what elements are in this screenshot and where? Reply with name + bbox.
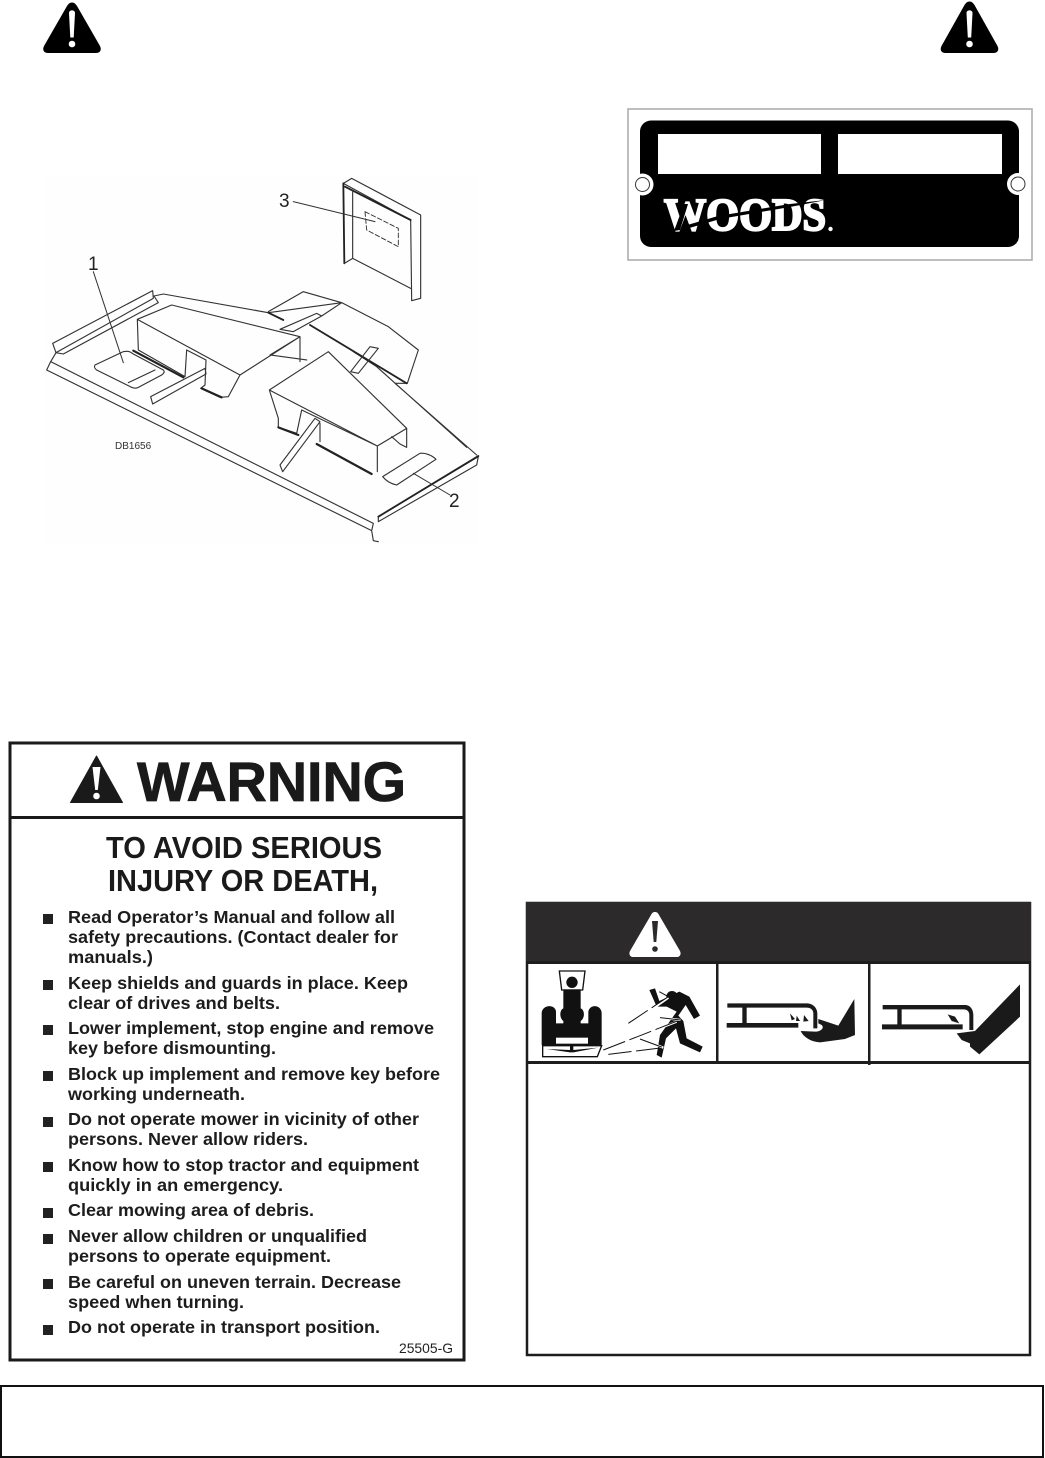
- heading: to avoid serious injury or death: INJURY OR DEATH,: [108, 863, 378, 898]
- safety instruction list: Be careful on uneven terrain. Decrease: [68, 1272, 401, 1292]
- safety instruction list: safety precautions. (Contact dealer for: [68, 927, 398, 947]
- empty notice box at page bottom: [1, 1386, 1043, 1457]
- safety instruction list: Clear mowing area of debris.: [68, 1200, 314, 1220]
- safety instruction list: Read Operator’s Manual and follow all: [68, 907, 395, 927]
- safety instruction list: working underneath.: [67, 1084, 245, 1104]
- diagram: mower deck decal locations: 2: [449, 491, 460, 512]
- left gearbox frame: [137, 305, 307, 397]
- heading: WARNING: WARNING: [137, 750, 406, 813]
- panel: warning decal: [10, 743, 464, 1360]
- diagram: mower deck decal locations: DB1656: [115, 441, 152, 452]
- safety instruction list: Do not operate in transport position.: [68, 1317, 380, 1337]
- safety instruction list: Know how to stop tractor and equipment: [68, 1155, 419, 1175]
- safety instruction list: persons. Never allow riders.: [68, 1129, 308, 1149]
- shield panel: [343, 178, 421, 301]
- heading: to avoid serious injury or death: [106, 830, 382, 898]
- deck outline: [53, 291, 418, 383]
- right gearbox frame: [269, 352, 407, 472]
- pictogram: thrown objects from mower: [542, 971, 703, 1058]
- diagram: mower deck decal locations: [45, 175, 478, 545]
- nameplate: Woods serial tag: [628, 109, 1032, 260]
- safety instruction list: clear of drives and belts.: [68, 993, 280, 1013]
- icon: header alert triangle: [629, 912, 681, 957]
- leader lines: [93, 202, 450, 495]
- safety instruction list: speed when turning.: [68, 1292, 244, 1312]
- safety instruction list: Do not operate mower in vicinity of other: [68, 1109, 419, 1129]
- icon: right safety alert triangle: [941, 2, 998, 53]
- diagram: mower deck decal locations: 1: [88, 254, 99, 275]
- nameplate: Woods serial tag: WOODS: [664, 190, 826, 240]
- pictogram: foot near blade housing: [882, 984, 1020, 1054]
- header band: [526, 902, 1031, 962]
- callout numbers: 3: [279, 191, 290, 212]
- safety instruction list: [43, 907, 440, 1337]
- safety instruction list: manuals.): [68, 947, 153, 967]
- panel: danger decal with pictograms: [526, 902, 1031, 1355]
- safety instruction list: Lower implement, stop engine and remove: [68, 1018, 434, 1038]
- pictogram: hand near blade housing: [727, 999, 855, 1042]
- icon: warning triangle: [70, 756, 122, 802]
- safety instruction list: Never allow children or unqualified: [68, 1226, 367, 1246]
- icon: left safety alert triangle: [43, 2, 101, 53]
- part number: 25505-G: [399, 1340, 453, 1356]
- safety instruction list: Keep shields and guards in place. Keep: [68, 973, 408, 993]
- safety instruction list: key before dismounting.: [68, 1038, 276, 1058]
- safety instruction list: persons to operate equipment.: [68, 1246, 331, 1266]
- safety instruction list: quickly in an emergency.: [68, 1175, 283, 1195]
- safety instruction list: Block up implement and remove key before: [68, 1064, 440, 1084]
- heading: to avoid serious injury or death: TO AVOID SERIOUS: [106, 830, 382, 865]
- decal 1: [95, 351, 164, 388]
- decal 2: [383, 453, 436, 485]
